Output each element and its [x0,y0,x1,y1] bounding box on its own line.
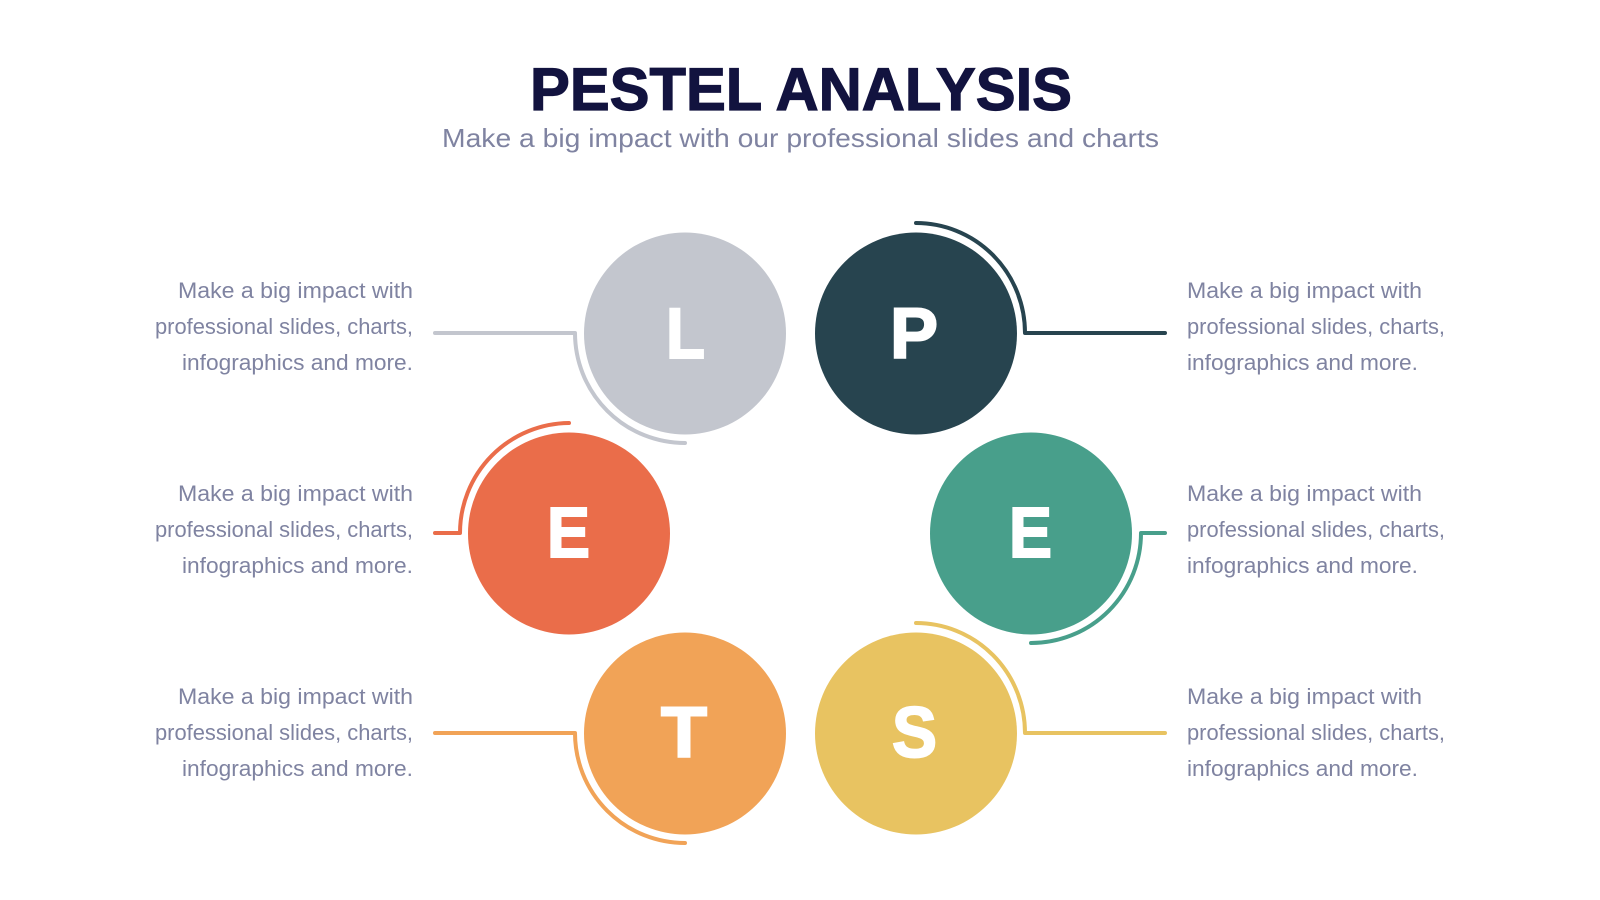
text block: E right: Make a big impact with [1187,481,1422,506]
text block: P [1187,278,1445,375]
letter: P: P [890,295,938,374]
segment: L legal [155,232,786,443]
text block: L [155,278,413,375]
text block: T: professional slides, charts, [155,720,413,745]
subtitle: Make a big impact with our professional slides and charts [442,123,1159,153]
text block: S: infographics and more. [1187,756,1418,781]
text block: E left: infographics and more. [182,553,413,578]
text block: T: infographics and more. [182,756,413,781]
text block: E right: professional slides, charts, [1187,517,1445,542]
text block: P: infographics and more. [1187,350,1418,375]
text block: S: professional slides, charts, [1187,720,1445,745]
circle: P [815,232,1017,434]
text block: E left: Make a big impact with [178,481,413,506]
circle: T [584,632,786,834]
segment: E economic [930,432,1445,643]
circle: E left [468,432,670,634]
letter: E left: E [547,494,590,573]
segment: P political [815,223,1445,434]
letter: T: T [661,694,707,773]
circle: L [584,232,786,434]
text block: L: Make a big impact with [178,278,413,303]
text block: E right [1187,481,1445,578]
segment: T technological [155,632,786,843]
text block: E left: professional slides, charts, [155,517,413,542]
segment: E environmental [155,423,670,634]
connector: L [435,333,685,443]
text block: P: Make a big impact with [1187,278,1422,303]
connector: E left [435,423,569,533]
text block: L: professional slides, charts, [155,314,413,339]
connector: P [916,223,1165,333]
letter: S: S [892,694,937,773]
text block: S: Make a big impact with [1187,684,1422,709]
connector: T [435,733,685,843]
text block: E left [155,481,413,578]
title: PESTEL ANALYSIS [530,56,1072,123]
text block: S [1187,684,1445,781]
segment: S social [815,623,1445,834]
text block: E right: infographics and more. [1187,553,1418,578]
letter: L: L [666,295,705,374]
text block: T: Make a big impact with [178,684,413,709]
text block: T [155,684,413,781]
circle: S [815,632,1017,834]
connector: E right [1031,533,1165,643]
letter: E right: E [1009,494,1052,573]
circle: E right [930,432,1132,634]
text block: L: infographics and more. [182,350,413,375]
text block: P: professional slides, charts, [1187,314,1445,339]
connector: S [916,623,1165,733]
